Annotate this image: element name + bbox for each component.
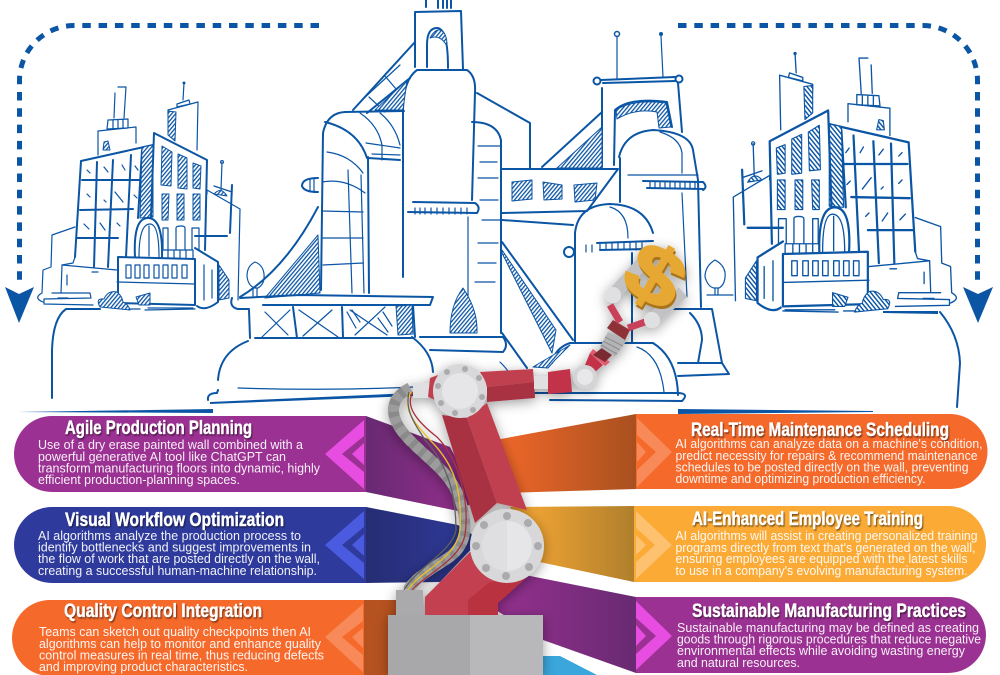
panel 6 ribbon [480,572,636,673]
sketch: central column with pipes [408,93,573,378]
panel 2 body shape [14,507,366,583]
icon: gold dollar sign: $ [610,226,702,331]
heading: Quality Control Integration: Quality Control Integration [64,601,262,622]
panel 6 body shape [636,597,986,673]
panel 2 ribbon [366,507,480,583]
text block: panel 3: and improving product characteristics. [39,660,248,674]
text block: panel 6: goods through rigorous procedures that reduce negative [677,633,981,647]
heading: Real-Time Maintenance Scheduling: Real-Time Maintenance Scheduling [691,420,949,441]
panel 3 ribbon [364,600,400,675]
text block: panel 4: schedules to be posted directly on the wall, preventing [676,461,969,475]
text block: panel 3 [39,625,324,674]
text block: panel 1: transform manufacturing floors into dynamic, highly [38,462,321,476]
icon: panel 6 chevrons [636,601,672,670]
sketch: left pedestal [18,309,213,413]
text block: panel 4: downtime and optimizing production efficiency. [676,472,926,486]
heading: AI-Enhanced Employee Training: AI-Enhanced Employee Training [692,509,923,530]
text block: panel 4: AI algorithms can analyze data on a machine's condition, [676,437,982,451]
panel: Real-Time Maintenance Scheduling [490,414,988,493]
panel 3 body shape [12,600,364,675]
gripper [605,262,683,328]
sketch: central factory right [502,32,729,401]
text block: panel 4 [676,437,982,486]
text block: panel 5: programs directly from text that's generated on the wall, [676,541,976,555]
blue ribbon fragment [543,656,597,675]
text block: panel 3: control measures in real time, thus reducing defects [39,648,324,662]
panel: Visual Workflow Optimization [14,507,480,583]
upper arm [413,369,572,402]
text block: panel 1 [38,438,321,487]
icon: panel 4 chevrons [637,418,672,487]
icon: panel 1 chevrons [325,420,364,489]
text block: panel 6 [677,621,981,670]
dashed arrow: left [5,25,319,323]
panel: Quality Control Integration [12,600,400,675]
text block: panel 3: algorithms can help to monitor and enhance quality [39,637,322,651]
text block: panel 2: identify bottlenecks and suggest improvements in [38,541,311,555]
robot base block [388,590,543,675]
sketch: right city building [733,52,956,312]
wrist joint [573,320,630,389]
text block: panel 5 [676,529,978,578]
panel 4 ribbon [490,414,636,493]
text block: panel 6: Sustainable manufacturing may be defined as creating [677,621,979,635]
panel 1 ribbon [366,416,478,511]
text block: panel 1: Use of a dry erase painted wall combined with a [38,438,303,452]
text block: panel 2: creating a successful human-machine relationship. [38,564,317,578]
text block: panel 2: AI algorithms analyze the production process to [38,529,301,543]
icon: panel 2 chevrons [325,511,364,579]
icon: gold dollar sign: $ [609,223,701,328]
sketch: right pedestal [678,311,960,414]
panel: AI-Enhanced Employee Training [510,506,986,582]
text block: panel 6: environmental effects while avoiding wasting energy [677,644,966,658]
robot arm [388,223,702,675]
dashed arrow: right [678,25,993,323]
panel 5 ribbon [510,506,634,582]
text block: panel 3: Teams can sketch out quality checkpoints then AI [39,625,311,639]
main arm [442,403,527,523]
elbow disk [470,509,544,583]
text block: panel 4: predict necessity for repairs & recommend maintenance [676,449,978,463]
panel 4 body shape [636,414,988,489]
text block: panel 2 [38,529,320,578]
text block: panel 1: efficient production-planning spaces. [38,473,240,487]
panel 5 body shape [634,506,986,582]
cable chain [394,388,466,590]
panel 1 body shape [14,416,366,492]
lower arm base [425,552,527,615]
heading: Visual Workflow Optimization: Visual Workflow Optimization [65,510,284,531]
panel: Sustainable Manufacturing Practices [480,572,986,673]
panel: Agile Production Planning [14,416,478,511]
sketch: central factory left [208,0,475,404]
icon: panel 5 chevrons [636,511,672,579]
text block: panel 6: and natural resources. [677,656,800,670]
sketch: trees and ground [247,260,733,297]
shoulder disk [433,364,487,418]
heading: Agile Production Planning: Agile Production Planning [65,418,252,439]
icon: panel 3 chevrons [325,604,363,672]
text block: panel 5: AI algorithms will assist in creating personalized training [676,529,978,543]
text block: panel 2: the flow of work that are posted directly on the wall, [38,552,320,566]
sketch: left city building [38,82,240,310]
text block: panel 1: powerful generative AI tool like ChatGPT can [38,450,286,464]
text block: panel 5: ensuring employees are equipped with the latest skills [676,552,968,566]
text block: panel 5: to use in a company's evolving manufacturing system. [676,564,968,578]
